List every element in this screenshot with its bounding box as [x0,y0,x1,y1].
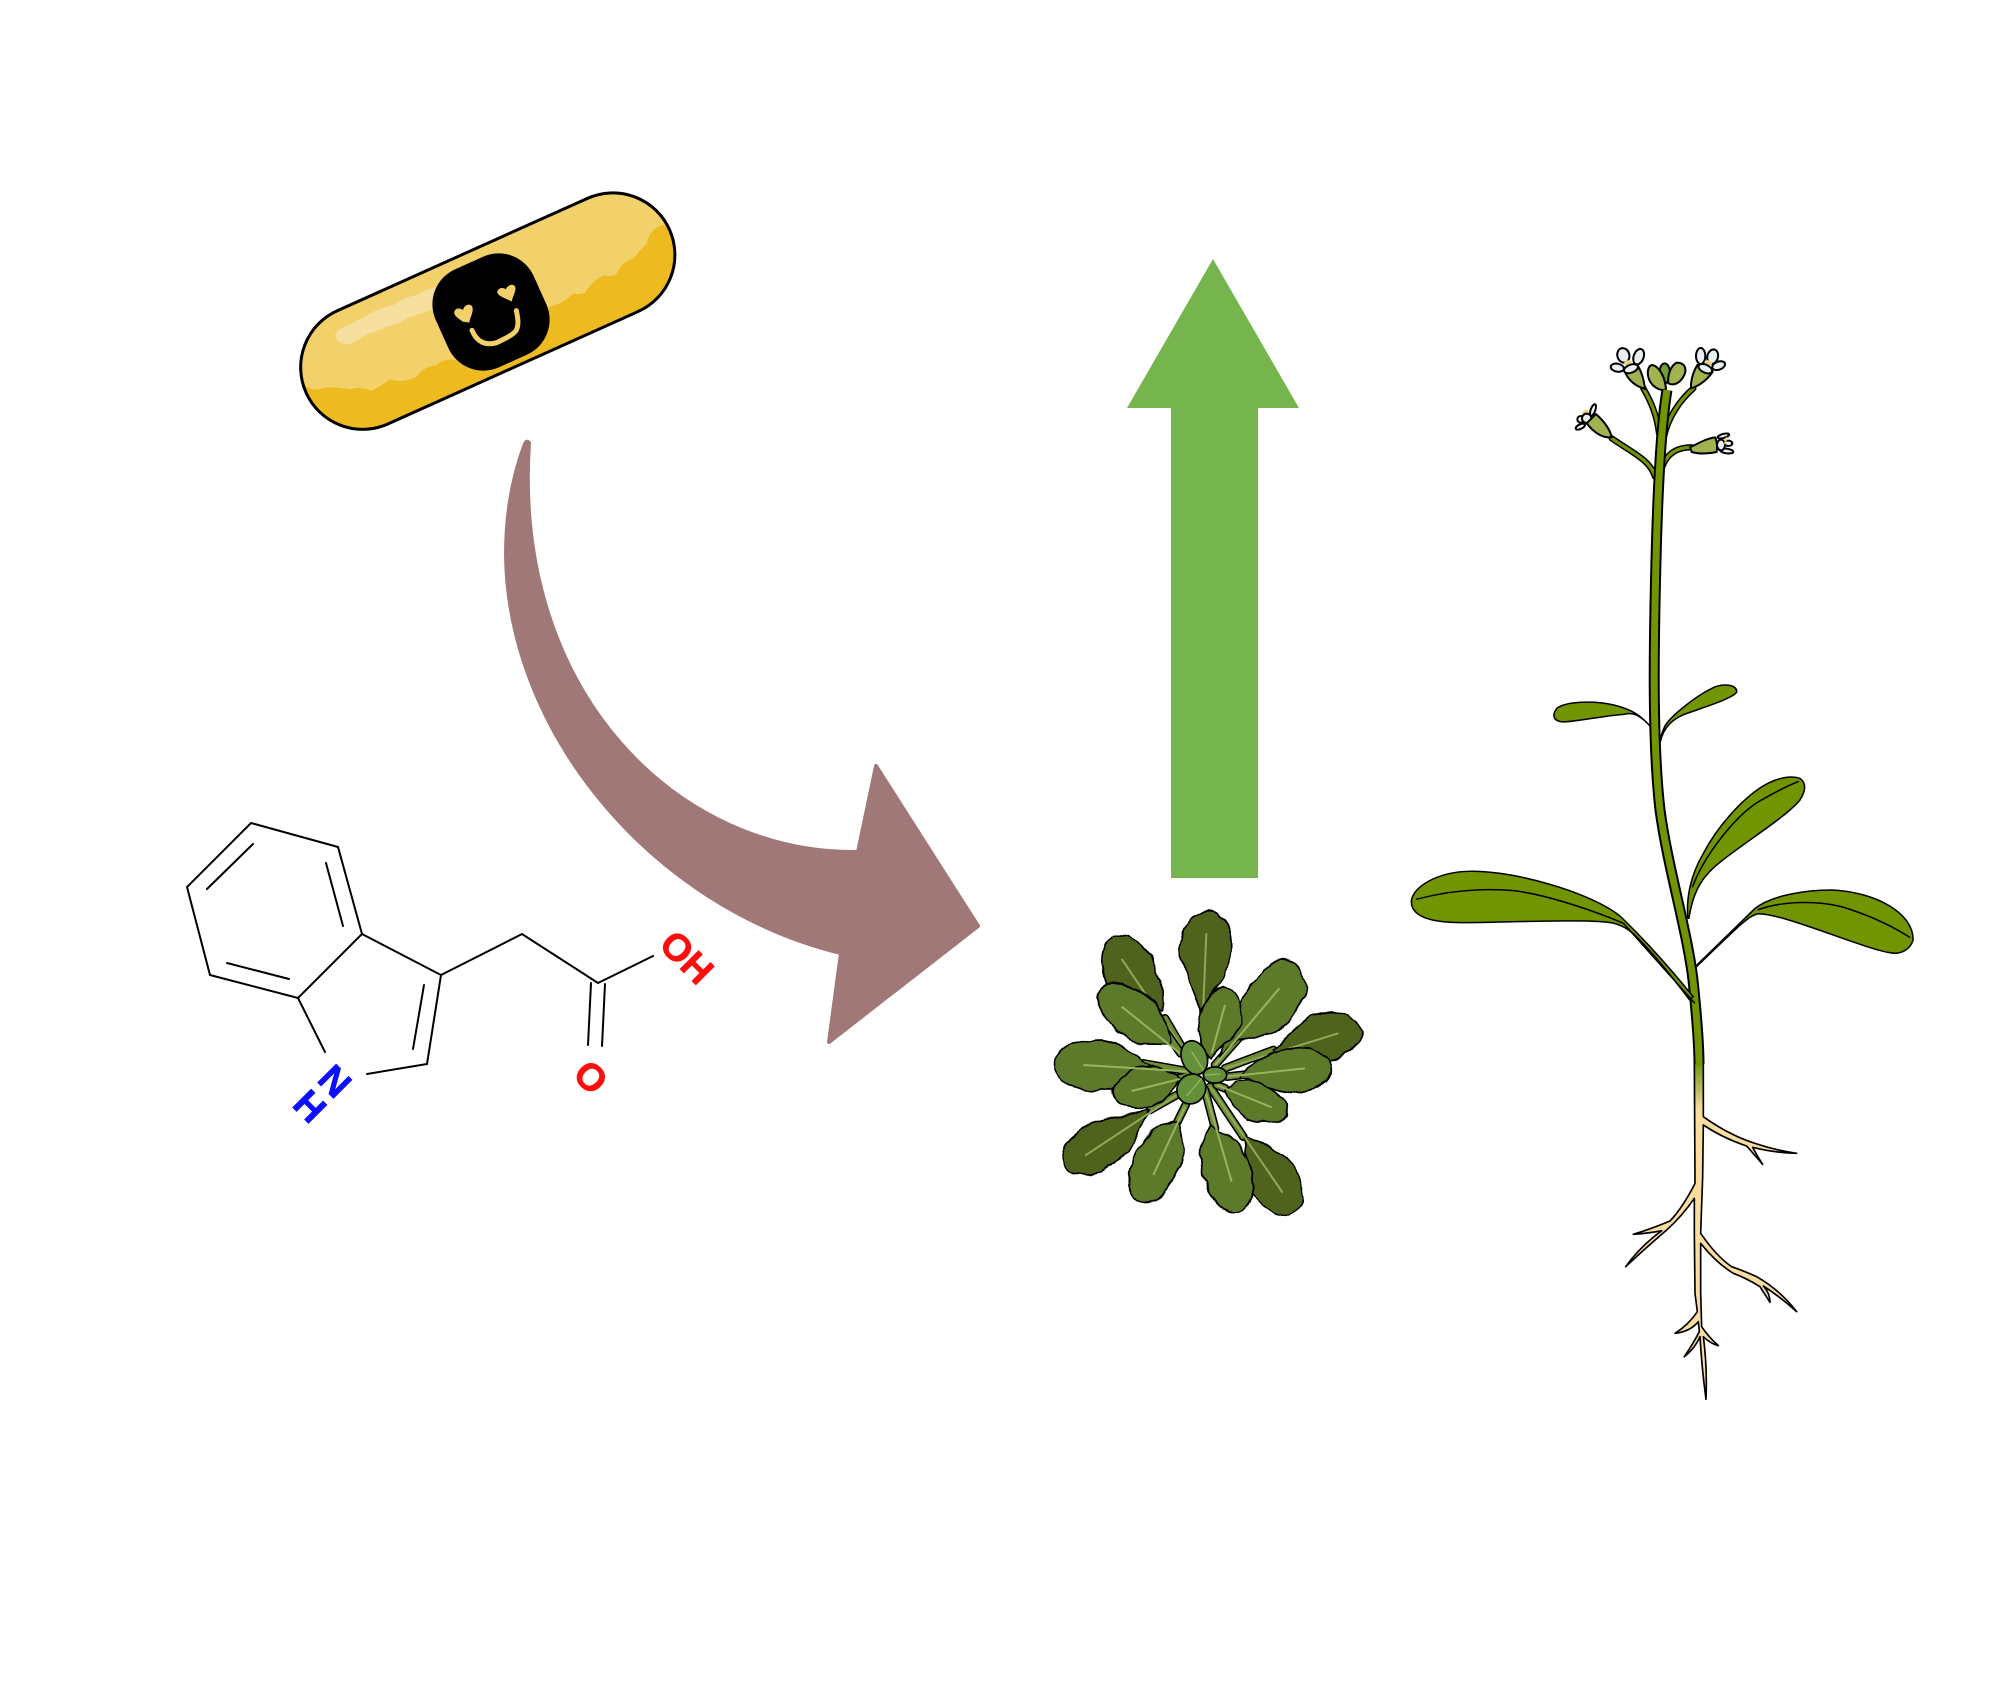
illustration: plant rosette [1054,910,1362,1216]
infographic canvas [186,191,1914,1400]
rosette older dark leaves [1063,910,1362,1216]
icon: happy bacterium [299,191,676,431]
flower pedicels [1612,388,1693,477]
smiley face [420,241,562,383]
rosette central veins [1187,1052,1220,1096]
arrow: bacterium produces auxin, acting on plant [506,442,978,1042]
plant main stem [1654,390,1699,1066]
bacterium body [281,173,695,449]
rosette light leaf veins [1083,988,1305,1182]
rosette dark leaf veins [1085,933,1338,1193]
bonds [187,823,653,1074]
chemical structure: indole-3-acetic acid [187,823,721,1132]
bacterium shaded underside [305,224,674,428]
rosette younger petioles [1143,1033,1257,1128]
illustration: mature flowering plant [1411,347,1913,1399]
atom label: O: O [565,1053,615,1103]
bacterium outline [281,173,695,449]
plant stem leaves [1411,685,1913,1003]
atom label: HN: N [309,1057,359,1107]
arrow: growth increase [1127,259,1299,878]
plant inflorescence [1575,347,1734,477]
open flowers [1575,347,1734,454]
bacterium highlight [335,287,440,344]
flower buds [1648,363,1685,390]
atom label: OH: OH [651,923,721,993]
rosette central young leaves [1171,1037,1227,1110]
atom label: HN: H [284,1082,334,1132]
atom label: HN [284,1057,359,1132]
rosette older petioles [1150,1005,1273,1137]
plant roots [1626,1060,1797,1399]
rosette younger light leaves [1054,961,1332,1213]
